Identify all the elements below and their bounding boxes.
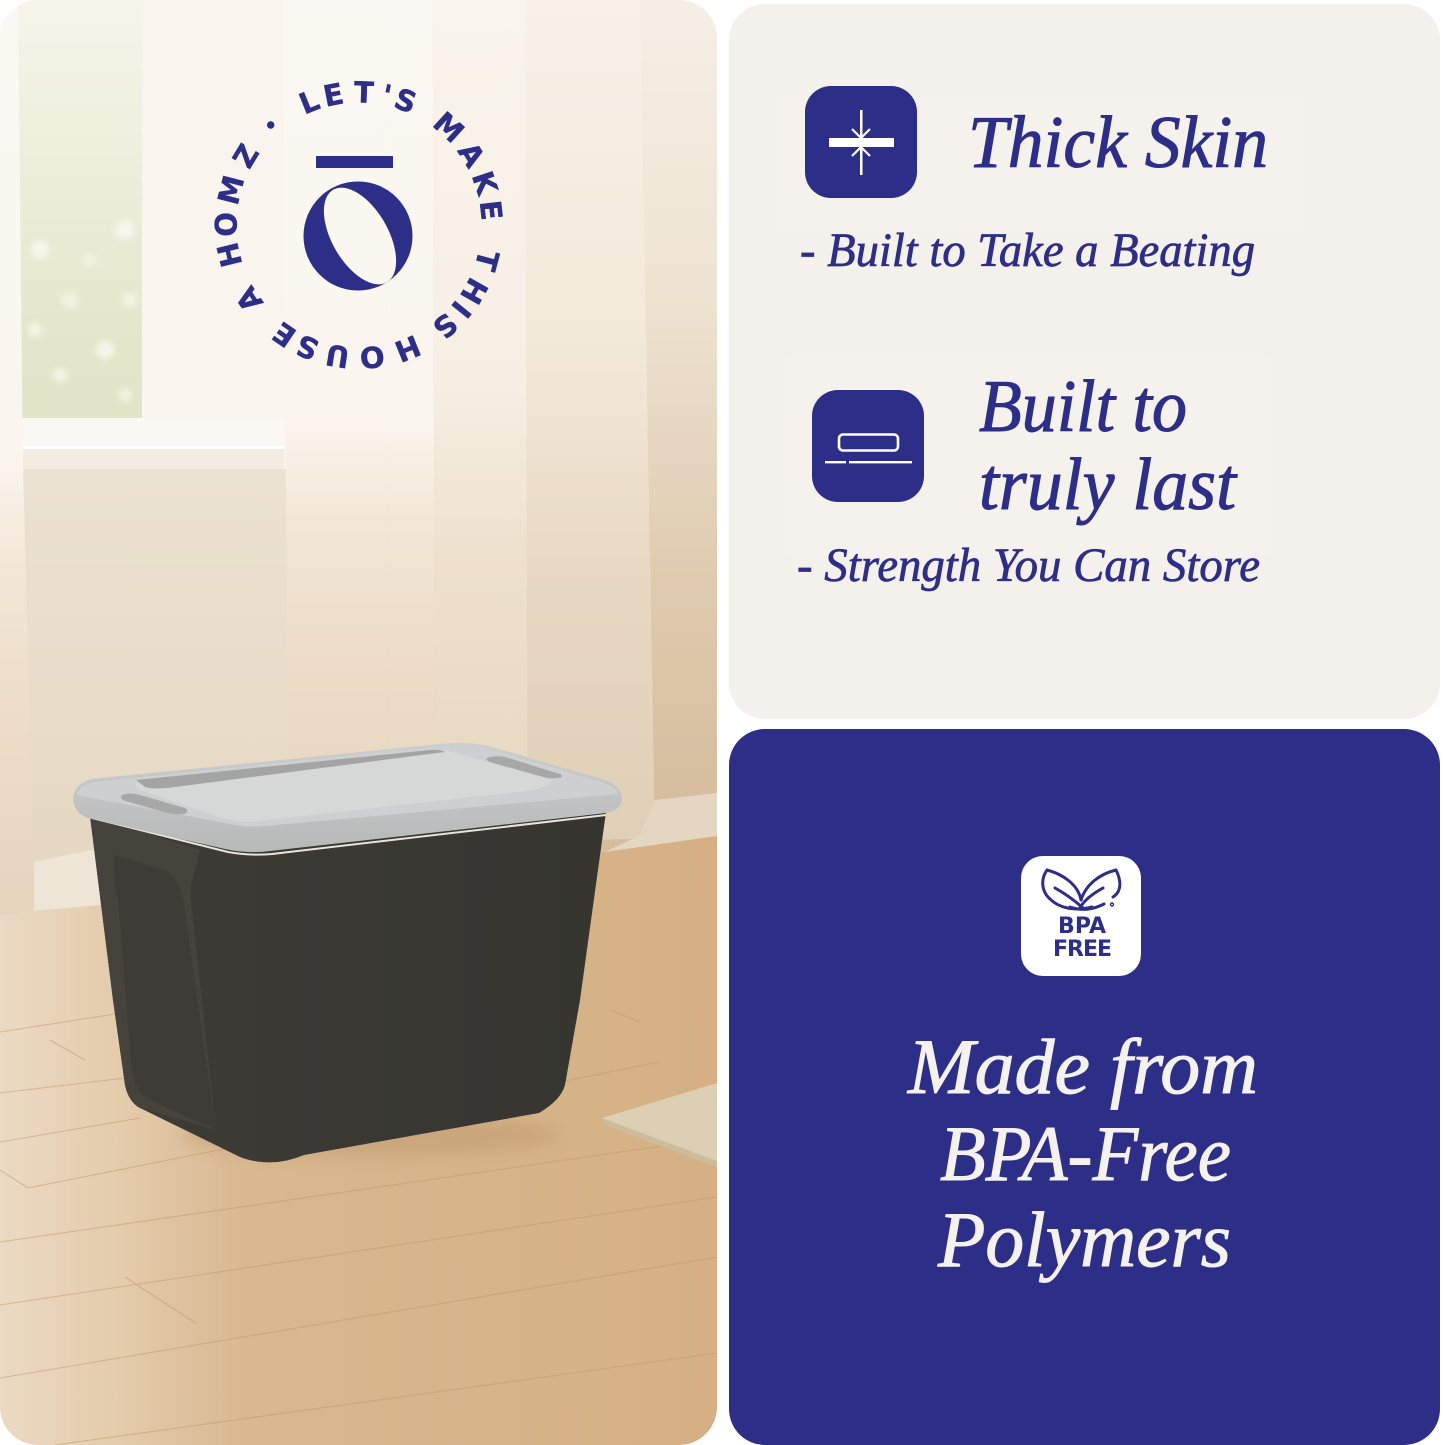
logo bar xyxy=(316,156,393,168)
bin lid xyxy=(73,743,622,852)
ring dot xyxy=(267,121,274,129)
badge text: BPA xyxy=(1058,914,1106,939)
wood floor xyxy=(0,836,717,1445)
panel: room photo xyxy=(0,0,717,1445)
circular slogan: LET'S MAKE THIS HOUSE A HOMZ xyxy=(210,75,509,375)
bin shadow xyxy=(185,1120,548,1156)
storage bin xyxy=(73,743,622,1162)
bin handle recess xyxy=(114,855,216,1130)
panel: BPA free xyxy=(729,729,1440,1445)
heading: built to truly last xyxy=(979,366,1238,526)
lid recess xyxy=(136,750,552,822)
lid handles xyxy=(121,794,187,814)
icon: thick wall xyxy=(805,86,917,198)
badge text xyxy=(1053,914,1112,962)
icon: lid profile xyxy=(812,390,924,502)
panel: features xyxy=(729,4,1440,719)
heading: made from BPA-free polymers xyxy=(907,1023,1258,1283)
window with blurred foliage xyxy=(0,0,290,470)
window sill xyxy=(22,446,284,469)
rug xyxy=(602,1083,717,1167)
logo ring xyxy=(304,182,412,290)
heading: made from BPA-free polymers: Polymers xyxy=(937,1196,1231,1283)
heading: thick skin: Thick Skin xyxy=(968,102,1268,184)
baseboard xyxy=(34,793,717,911)
heading: built to truly last: Built to xyxy=(979,366,1187,448)
icon: BPA free badge xyxy=(1021,856,1141,976)
subheading: beating: - Built to Take a Beating xyxy=(800,224,1255,277)
wall background xyxy=(0,0,717,930)
badge text: FREE xyxy=(1053,937,1112,962)
heading: built to truly last: truly last xyxy=(979,444,1238,526)
heading: made from BPA-free polymers: Made from xyxy=(907,1023,1258,1110)
heading: made from BPA-free polymers: BPA-Free xyxy=(940,1110,1231,1197)
logo badge xyxy=(210,75,509,375)
rim line under lid xyxy=(92,815,606,855)
sheer curtains xyxy=(0,0,655,920)
bin side rim xyxy=(90,816,216,1130)
bin body xyxy=(90,812,606,1162)
leaves xyxy=(1043,870,1120,909)
subheading: strength: - Strength You Can Store xyxy=(797,539,1260,592)
lower wall xyxy=(23,469,288,909)
